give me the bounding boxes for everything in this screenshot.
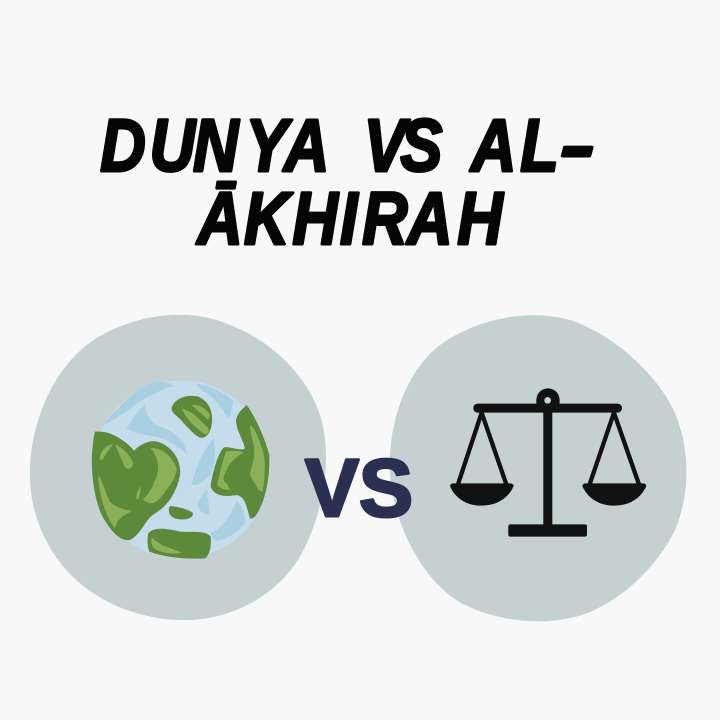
pivot ring bbox=[536, 388, 560, 405]
title: - bbox=[560, 105, 595, 187]
left strings bbox=[458, 413, 507, 485]
land masses bbox=[92, 396, 269, 559]
title: AL bbox=[469, 104, 559, 187]
left pan bbox=[450, 483, 514, 506]
icon: balance scales bbox=[450, 388, 646, 537]
globe ocean bbox=[92, 380, 270, 558]
land highlights bbox=[98, 405, 265, 554]
base bbox=[508, 524, 587, 537]
title: VS bbox=[364, 104, 442, 187]
vs label: VS bbox=[305, 443, 413, 534]
beam bbox=[473, 404, 622, 413]
panel: dunya blob bbox=[30, 315, 326, 620]
icon: earth globe bbox=[92, 380, 270, 559]
title: DUNYA bbox=[100, 104, 329, 187]
right strings bbox=[589, 413, 639, 485]
ocean shading bbox=[104, 381, 245, 541]
central post bbox=[543, 410, 552, 527]
right pan bbox=[582, 483, 646, 506]
panel: akhirah blob bbox=[390, 315, 686, 621]
title: ĀKHIRAH bbox=[195, 177, 504, 260]
title bbox=[100, 104, 595, 260]
